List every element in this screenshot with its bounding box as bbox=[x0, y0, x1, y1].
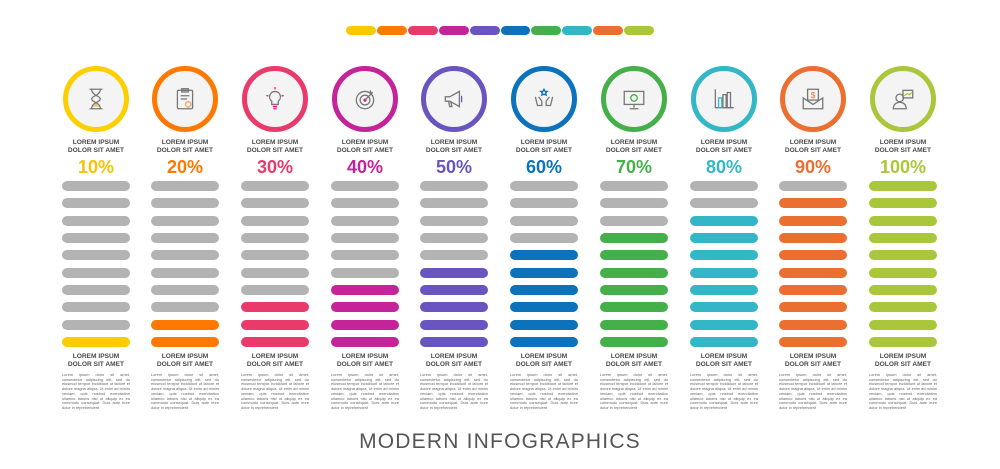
bottom label: LOREM IPSUM bbox=[342, 353, 388, 360]
label: LOREM IPSUM bbox=[790, 139, 836, 146]
column 30% bbox=[241, 66, 309, 410]
bottom label bbox=[247, 353, 303, 368]
percent: 100% bbox=[880, 157, 926, 177]
icon: hourglass bbox=[63, 66, 129, 132]
label: LOREM IPSUM bbox=[73, 139, 119, 146]
bars bbox=[690, 181, 758, 347]
bottom label bbox=[785, 353, 841, 368]
bottom label: LOREM IPSUM bbox=[611, 353, 657, 360]
label bbox=[696, 139, 752, 154]
bottom label bbox=[157, 353, 213, 368]
bottom label: LOREM IPSUM bbox=[252, 353, 298, 360]
icon: envelope dollar bbox=[780, 66, 846, 132]
label: LOREM IPSUM bbox=[521, 139, 567, 146]
label: DOLOR SIT AMET bbox=[606, 147, 662, 154]
column 100% bbox=[869, 66, 937, 410]
bottom label: LOREM IPSUM bbox=[162, 353, 208, 360]
bottom label: DOLOR SIT AMET bbox=[337, 361, 393, 368]
column 50% bbox=[420, 66, 488, 410]
label bbox=[606, 139, 662, 154]
percent: 20% bbox=[167, 157, 203, 177]
label: DOLOR SIT AMET bbox=[785, 147, 841, 154]
bottom label: LOREM IPSUM bbox=[701, 353, 747, 360]
label bbox=[247, 139, 303, 154]
paragraph: Lorem ipsum dolor sit amet, consectetur adipiscing elit, sed do eiusmod tempor incididunt ut labore et dolore magna aliqua. Ut enim ad minim veniam, quis nostrud exercitation ullamco laboris nisi ut aliquip ex ea commodo consequat. Duis aute irure dolor in reprehenderit bbox=[62, 372, 130, 410]
bottom label: LOREM IPSUM bbox=[790, 353, 836, 360]
bottom label: LOREM IPSUM bbox=[431, 353, 477, 360]
percent: 50% bbox=[436, 157, 472, 177]
bottom label: DOLOR SIT AMET bbox=[247, 361, 303, 368]
bottom label: DOLOR SIT AMET bbox=[157, 361, 213, 368]
bars bbox=[151, 181, 219, 347]
percent: 60% bbox=[526, 157, 562, 177]
label: LOREM IPSUM bbox=[162, 139, 208, 146]
bottom label bbox=[516, 353, 572, 368]
bottom label: LOREM IPSUM bbox=[521, 353, 567, 360]
percent: 10% bbox=[78, 157, 114, 177]
icon: hands with star bbox=[511, 66, 577, 132]
bottom label: DOLOR SIT AMET bbox=[696, 361, 752, 368]
bars bbox=[779, 181, 847, 347]
bottom label: DOLOR SIT AMET bbox=[785, 361, 841, 368]
percent: 40% bbox=[347, 157, 383, 177]
bars bbox=[869, 181, 937, 347]
bars bbox=[510, 181, 578, 347]
bottom label: LOREM IPSUM bbox=[73, 353, 119, 360]
bars bbox=[600, 181, 668, 347]
icon: megaphone bbox=[421, 66, 487, 132]
label: DOLOR SIT AMET bbox=[157, 147, 213, 154]
label: LOREM IPSUM bbox=[611, 139, 657, 146]
bottom label bbox=[337, 353, 393, 368]
bottom label bbox=[426, 353, 482, 368]
label: LOREM IPSUM bbox=[252, 139, 298, 146]
paragraph: Lorem ipsum dolor sit amet, consectetur adipiscing elit, sed do eiusmod tempor incididunt ut labore et dolore magna aliqua. Ut enim ad minim veniam, quis nostrud exercitation ullamco laboris nisi ut aliquip ex ea commodo consequat. Duis aute irure dolor in reprehenderit bbox=[690, 372, 758, 410]
bottom label bbox=[68, 353, 124, 368]
paragraph: Lorem ipsum dolor sit amet, consectetur adipiscing elit, sed do eiusmod tempor incididunt ut labore et dolore magna aliqua. Ut enim ad minim veniam, quis nostrud exercitation ullamco laboris nisi ut aliquip ex ea commodo consequat. Duis aute irure dolor in reprehenderit bbox=[241, 372, 309, 410]
bottom label: DOLOR SIT AMET bbox=[516, 361, 572, 368]
paragraph: Lorem ipsum dolor sit amet, consectetur adipiscing elit, sed do eiusmod tempor incididunt ut labore et dolore magna aliqua. Ut enim ad minim veniam, quis nostrud exercitation ullamco laboris nisi ut aliquip ex ea commodo consequat. Duis aute irure dolor in reprehenderit bbox=[600, 372, 668, 410]
label bbox=[516, 139, 572, 154]
percent: 90% bbox=[795, 157, 831, 177]
label bbox=[68, 139, 124, 154]
column 40% bbox=[331, 66, 399, 410]
bottom label bbox=[696, 353, 752, 368]
column 20% bbox=[151, 66, 219, 410]
icon: clipboard bbox=[152, 66, 218, 132]
percent: 70% bbox=[616, 157, 652, 177]
color strip bbox=[346, 26, 654, 35]
label bbox=[157, 139, 213, 154]
percent: 80% bbox=[706, 157, 742, 177]
label: LOREM IPSUM bbox=[880, 139, 926, 146]
icon: monitor money bbox=[601, 66, 667, 132]
bottom label: DOLOR SIT AMET bbox=[875, 361, 931, 368]
icon: lightbulb bbox=[242, 66, 308, 132]
label: DOLOR SIT AMET bbox=[337, 147, 393, 154]
bottom label bbox=[606, 353, 662, 368]
label: LOREM IPSUM bbox=[342, 139, 388, 146]
label bbox=[337, 139, 393, 154]
label: DOLOR SIT AMET bbox=[247, 147, 303, 154]
label: DOLOR SIT AMET bbox=[875, 147, 931, 154]
label bbox=[426, 139, 482, 154]
percent: 30% bbox=[257, 157, 293, 177]
column 10% bbox=[62, 66, 130, 410]
icon: person chart bbox=[870, 66, 936, 132]
label: DOLOR SIT AMET bbox=[426, 147, 482, 154]
bottom label: DOLOR SIT AMET bbox=[68, 361, 124, 368]
paragraph: Lorem ipsum dolor sit amet, consectetur adipiscing elit, sed do eiusmod tempor incididunt ut labore et dolore magna aliqua. Ut enim ad minim veniam, quis nostrud exercitation ullamco laboris nisi ut aliquip ex ea commodo consequat. Duis aute irure dolor in reprehenderit bbox=[331, 372, 399, 410]
bottom label bbox=[863, 353, 943, 369]
label: DOLOR SIT AMET bbox=[516, 147, 572, 154]
icon: target bbox=[332, 66, 398, 132]
bottom label: DOLOR SIT AMET bbox=[426, 361, 482, 368]
column 90% bbox=[779, 66, 847, 410]
paragraph: Lorem ipsum dolor sit amet, consectetur adipiscing elit, sed do eiusmod tempor incididunt ut labore et dolore magna aliqua. Ut enim ad minim veniam, quis nostrud exercitation ullamco laboris nisi ut aliquip ex ea commodo consequat. Duis aute irure dolor in reprehenderit bbox=[420, 372, 488, 410]
bars bbox=[331, 181, 399, 347]
paragraph: Lorem ipsum dolor sit amet, consectetur adipiscing elit, sed do eiusmod tempor incididunt ut labore et dolore magna aliqua. Ut enim ad minim veniam, quis nostrud exercitation ullamco laboris nisi ut aliquip ex ea commodo consequat. Duis aute irure dolor in reprehenderit bbox=[779, 372, 847, 410]
bars bbox=[62, 181, 130, 347]
icon: envelope dollar: $ bbox=[811, 90, 816, 100]
label: LOREM IPSUM bbox=[701, 139, 747, 146]
label bbox=[785, 139, 841, 154]
icon: bar chart bbox=[691, 66, 757, 132]
paragraph: Lorem ipsum dolor sit amet, consectetur adipiscing elit, sed do eiusmod tempor incididunt ut labore et dolore magna aliqua. Ut enim ad minim veniam, quis nostrud exercitation ullamco laboris nisi ut aliquip ex ea commodo consequat. Duis aute irure dolor in reprehenderit bbox=[510, 372, 578, 410]
label: DOLOR SIT AMET bbox=[696, 147, 752, 154]
column 70% bbox=[600, 66, 668, 410]
label bbox=[875, 139, 931, 154]
column 60% bbox=[510, 66, 578, 410]
column 80% bbox=[690, 66, 758, 410]
title: MODERN INFOGRAPHICS bbox=[359, 430, 641, 453]
label: DOLOR SIT AMET bbox=[68, 147, 124, 154]
bars bbox=[420, 181, 488, 347]
bottom label: LOREM IPSUM bbox=[880, 353, 926, 360]
bottom label: DOLOR SIT AMET bbox=[606, 361, 662, 368]
label: LOREM IPSUM bbox=[431, 139, 477, 146]
paragraph: Lorem ipsum dolor sit amet, consectetur adipiscing elit, sed do eiusmod tempor incididunt ut labore et dolore magna aliqua. Ut enim ad minim veniam, quis nostrud exercitation ullamco laboris nisi ut aliquip ex ea commodo consequat. Duis aute irure dolor in reprehenderit bbox=[869, 372, 937, 410]
paragraph: Lorem ipsum dolor sit amet, consectetur adipiscing elit, sed do eiusmod tempor incididunt ut labore et dolore magna aliqua. Ut enim ad minim veniam, quis nostrud exercitation ullamco laboris nisi ut aliquip ex ea commodo consequat. Duis aute irure dolor in reprehenderit bbox=[151, 372, 219, 410]
bars bbox=[241, 181, 309, 347]
